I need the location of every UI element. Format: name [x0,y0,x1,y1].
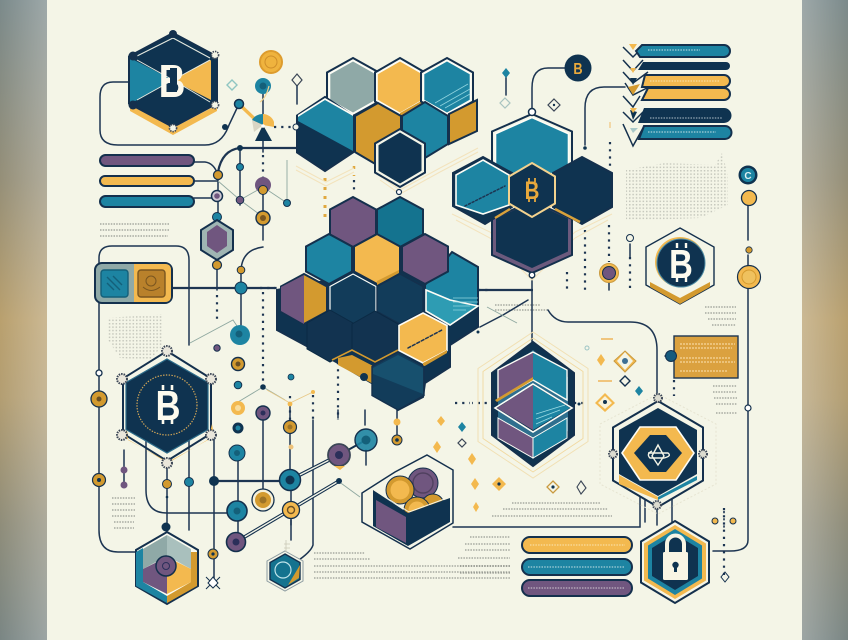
node [666,350,676,362]
hex: bitcoin centre: B [525,176,539,204]
bar: navy [638,62,730,70]
hex: navy row three right [377,274,423,324]
bar: yellow [522,537,632,553]
small diamonds centre [433,339,643,512]
hex: gold middle [355,103,401,165]
coins [386,468,444,523]
coin wallet [362,455,453,549]
coin: gold ringed [252,489,274,511]
hexagon cluster: central [277,197,478,410]
list bars with chevrons [583,44,732,150]
bitcoin hexagon right: B [669,240,693,287]
icon: cross diamond [206,577,220,589]
bitcoin hexagon large [117,346,216,468]
hex: grey [327,58,379,116]
small mid icons [476,234,634,334]
hex: teal striped [421,58,473,116]
connector lines [99,68,748,578]
hex: bottom navy [492,201,572,273]
bar: teal [100,196,194,207]
hex: yellow row two [354,234,400,285]
hex: navy front [375,129,425,187]
hex: purple and gold [281,274,327,324]
icon: gold square [138,270,165,297]
hex: top teal [492,114,572,184]
top-left hexagon with B [128,30,219,135]
deco lower right [712,511,736,582]
coin: gold [260,51,282,73]
bar: teal text [639,126,732,139]
middle rhombus [495,384,572,432]
bar: navy text [638,108,732,123]
lower left nodes [92,466,220,589]
network coins [226,429,377,552]
hex: navy row four [307,310,398,363]
bottom-left hexagon [136,532,198,604]
icon: teal square [101,270,128,297]
node on horizontal and teal coin [91,266,402,461]
left labelled bars [100,155,194,207]
hex shadow lines [296,148,478,194]
coin: purple [226,532,246,552]
coin: purple large [328,444,350,466]
coin: teal c: C [744,171,752,182]
bitcoin hexagon right [646,228,714,304]
bar: yellow [100,176,194,186]
coin: gold dark [256,211,270,225]
stacked hexagon [478,332,588,478]
bar: purple [100,155,194,166]
hex: navy bottom [372,352,424,410]
hex: purple row two [402,234,448,284]
left column nodes [201,170,290,270]
diamonds top [227,68,560,111]
coin: gold [738,266,760,288]
hexagon cluster: right with bitcoin [452,108,612,280]
gold note panel [666,336,738,378]
gold sliver [338,355,375,385]
coin: gold small [282,502,300,518]
pie chart [239,104,274,141]
top right coin: B [573,61,583,78]
hex: navy row three [330,274,376,324]
hex: teal back right [425,252,478,325]
coin: purple and gold [255,177,271,194]
top right coin [564,54,592,82]
chevrons [623,47,648,146]
bitcoin hexagon large: B [156,383,180,430]
icon panel [95,263,172,303]
bar: yellow [642,75,730,87]
hex: teal top [377,197,423,247]
coin: teal navy [280,470,300,490]
halo [478,332,588,478]
lock hexagon [641,521,709,603]
hex: teal right [402,102,448,158]
hex: yellow [375,58,425,117]
coin: teal large [355,429,377,451]
coin: teal [227,501,247,521]
icon: padlock [663,536,688,580]
bar: teal [522,559,632,575]
top-left hexagon with B: B [159,55,185,107]
hex: right navy [553,157,612,224]
bottom bars [522,537,632,596]
bar: yellow two [642,88,730,100]
small text blocks [100,224,737,578]
hexagon cluster: top [296,58,478,194]
pie node with coins [222,51,299,170]
bar: teal [636,45,730,57]
wallet body [373,490,450,546]
coin: purple gold ring [600,264,618,282]
hex: left teal [453,157,512,224]
hex: gold row four [399,313,447,367]
base navy mass [277,240,478,410]
coin: teal [255,78,271,94]
hex: purple top [330,197,376,247]
hex: gold right [449,100,477,144]
bottom teal hexagon icon [267,540,303,591]
right column coins [738,166,760,411]
hex: large teal [297,97,353,171]
bar: purple [522,580,632,596]
right hexagon with symbol [600,394,716,514]
small purple hexagon [201,220,233,260]
dot texture patches [108,153,728,360]
coin: teal c [738,166,758,184]
hex: teal row two [306,234,352,284]
hex: bitcoin centre [509,163,555,217]
